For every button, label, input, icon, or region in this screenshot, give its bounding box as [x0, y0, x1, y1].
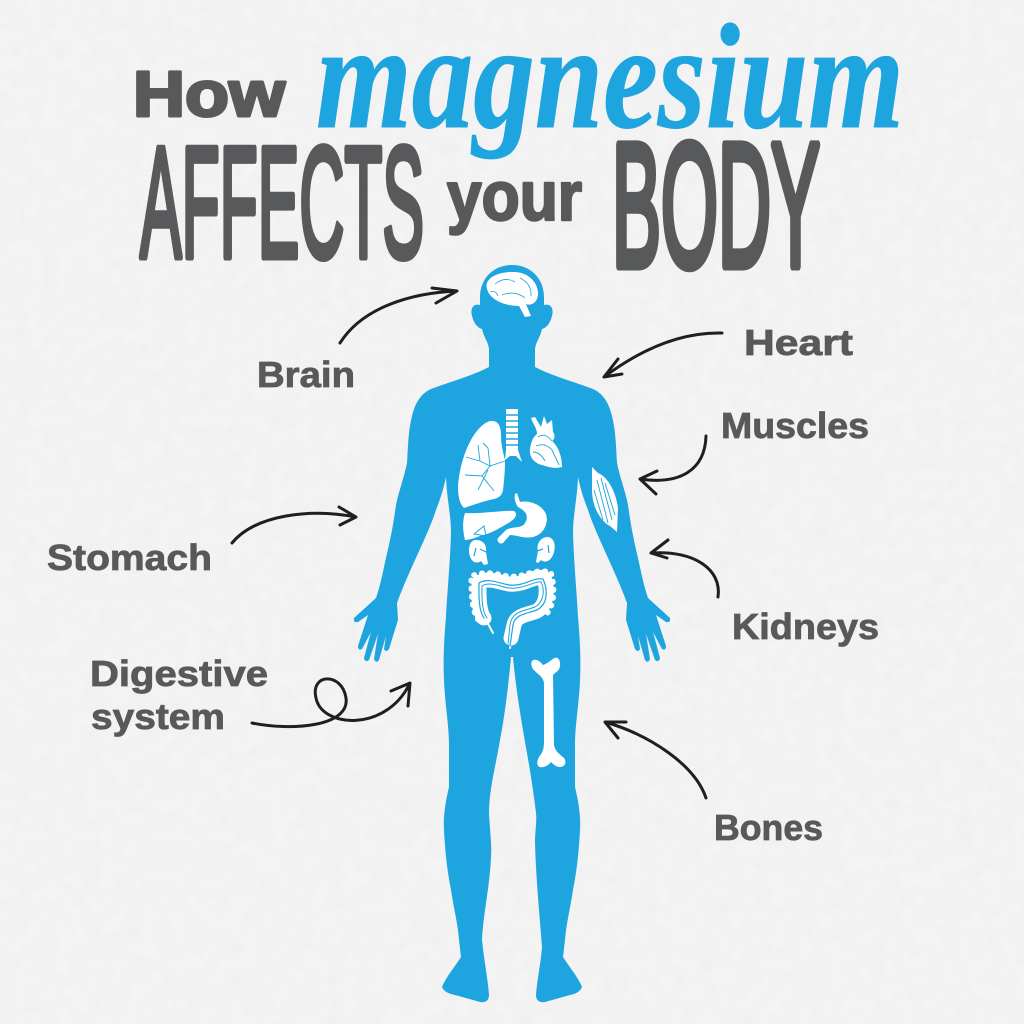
label: Digestive system	[90, 653, 268, 737]
organ: bicep muscle	[592, 467, 618, 532]
label: Digestive system: system	[91, 696, 225, 737]
human body figure	[354, 265, 670, 1002]
arrow: stomach	[232, 507, 356, 543]
organ: femur bone	[531, 658, 565, 767]
organ: lung	[458, 421, 505, 508]
title word: your: your	[447, 157, 582, 235]
arrow: digestive system	[252, 679, 410, 727]
organ: trachea	[505, 409, 522, 462]
arrow: bones	[605, 722, 706, 798]
label: Brain: Brain	[257, 354, 355, 395]
arrow: kidneys	[651, 540, 718, 597]
label: Bones: Bones	[714, 807, 823, 848]
title word: How: How	[133, 58, 285, 130]
organ: right kidney	[536, 537, 555, 563]
organ: brain	[487, 272, 538, 317]
body silhouette	[354, 265, 670, 1002]
title: AFFECTS	[140, 115, 424, 291]
arrow: muscles	[640, 436, 706, 494]
label: Stomach: Stomach	[47, 537, 212, 578]
title	[133, 0, 904, 304]
organ: stomach	[497, 493, 547, 544]
label: Muscles: Muscles	[721, 405, 869, 446]
organ: left kidney	[469, 540, 488, 565]
organ: heart	[530, 416, 562, 468]
label: Digestive system: Digestive	[90, 653, 268, 694]
organ: colon	[471, 571, 554, 648]
arrow: heart	[604, 333, 722, 377]
label: Kidneys: Kidneys	[732, 606, 879, 647]
label: Heart: Heart	[744, 322, 853, 363]
arrow: brain	[340, 288, 457, 343]
organ: liver	[463, 511, 516, 540]
